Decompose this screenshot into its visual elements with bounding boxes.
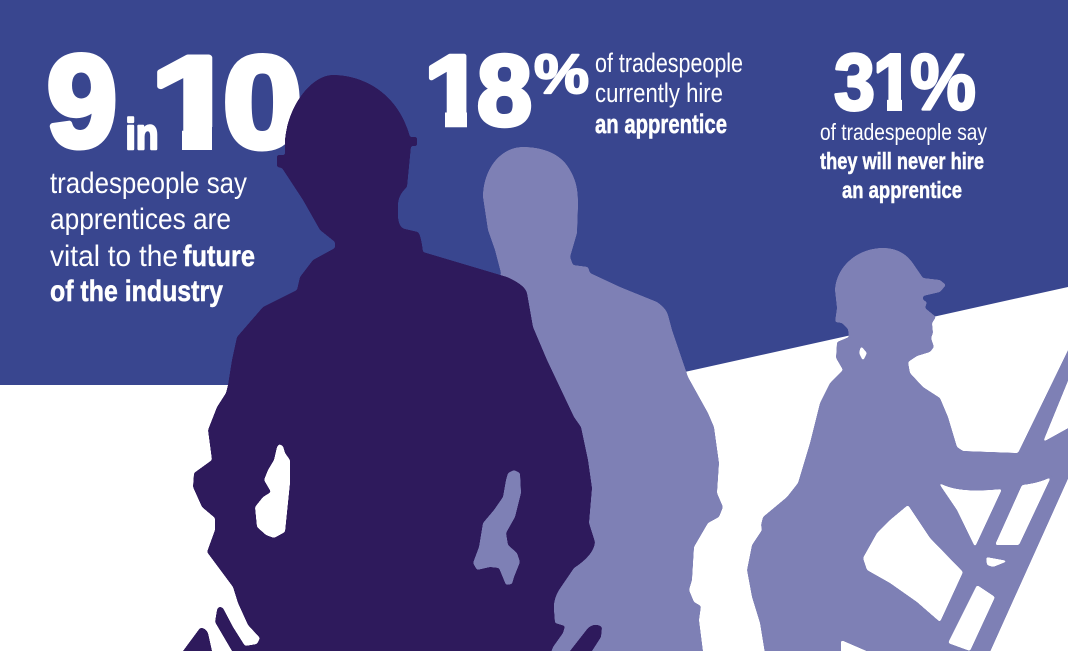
stat description: [50, 167, 255, 308]
stat description: vital to the: [50, 240, 178, 273]
stat description: an apprentice: [842, 177, 962, 203]
stat description: they will never hire: [820, 148, 984, 174]
stat description: future: [183, 240, 255, 273]
stat description: tradespeople say: [50, 167, 247, 200]
stat description: an apprentice: [595, 109, 727, 139]
big number 3 of 31: 3: [834, 38, 875, 126]
stat description: apprentices are: [50, 203, 231, 236]
stat description: of tradespeople: [595, 48, 743, 78]
stat description: [820, 119, 987, 203]
silhouette: man behind, light: [470, 147, 723, 651]
stat: 31 percent: [820, 38, 987, 203]
big number 1 of 18: 1: [424, 35, 484, 147]
silhouette: man in hard hat, dark: [168, 75, 602, 651]
stat description: of the industry: [50, 275, 223, 308]
big number 8 of 18: 8: [477, 35, 532, 147]
stat: 18 percent: [420, 35, 743, 147]
big number 9: 9: [47, 28, 117, 174]
silhouette: woman in cap climbing ladder: [747, 248, 1068, 651]
blue angled background panel: [0, 0, 1068, 385]
stat description: [595, 48, 743, 139]
big number 0 of 10: 0: [223, 29, 302, 175]
word in: in: [126, 110, 158, 159]
percent sign: %: [910, 38, 976, 126]
percent sign: %: [534, 42, 589, 105]
stat description: of tradespeople say: [820, 119, 987, 145]
big number 1 of 31: 1: [873, 38, 913, 126]
stat: 9 in 10: [47, 28, 302, 308]
stat description: currently hire: [595, 78, 723, 108]
big number 1 of 10: 1: [150, 29, 238, 175]
